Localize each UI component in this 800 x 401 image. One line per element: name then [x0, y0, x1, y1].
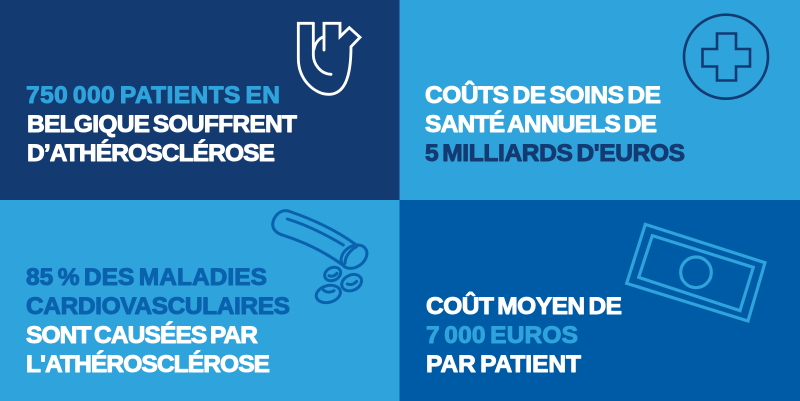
icon: heart — [298, 23, 360, 94]
heading: cardiovascular text — [26, 264, 290, 378]
heading: average cost text — [426, 292, 622, 378]
heading: cardiovascular text: SONT CAUSÉES PAR — [26, 321, 258, 349]
icon: medical cross — [684, 15, 768, 99]
heading: patients text: 750 000 PATIENTS EN — [26, 82, 280, 109]
heading: patients text — [26, 82, 297, 167]
panel: patients — [0, 0, 400, 200]
heading: costs text: SANTÉ ANNUELS DE — [425, 110, 657, 138]
heading: costs text — [425, 81, 685, 167]
panel: average cost — [400, 200, 800, 401]
panel: cardiovascular diseases — [0, 200, 400, 401]
heading: average cost text: COÛT MOYEN DE — [426, 292, 622, 320]
icon: artery and blood cells — [273, 211, 371, 305]
heading: average cost text: 7 000 EUROS — [426, 322, 578, 349]
panel: costs — [400, 0, 800, 200]
heading: costs text: 5 MILLIARDS D'EUROS — [425, 140, 685, 167]
heading: patients text: D’ATHÉROSCLÉROSE — [27, 139, 275, 167]
heading: average cost text: PAR PATIENT — [426, 351, 581, 378]
heading: cardiovascular text: 85 % DES MALADIES — [26, 264, 267, 291]
heading: patients text: BELGIQUE SOUFFRENT — [27, 111, 297, 138]
heading: costs text: COÛTS DE SOINS DE — [425, 81, 661, 109]
heading: cardiovascular text: CARDIOVASCULAIRES — [26, 293, 290, 320]
heading: cardiovascular text: L'ATHÉROSCLÉROSE — [26, 350, 270, 378]
icon: banknote — [627, 224, 765, 321]
